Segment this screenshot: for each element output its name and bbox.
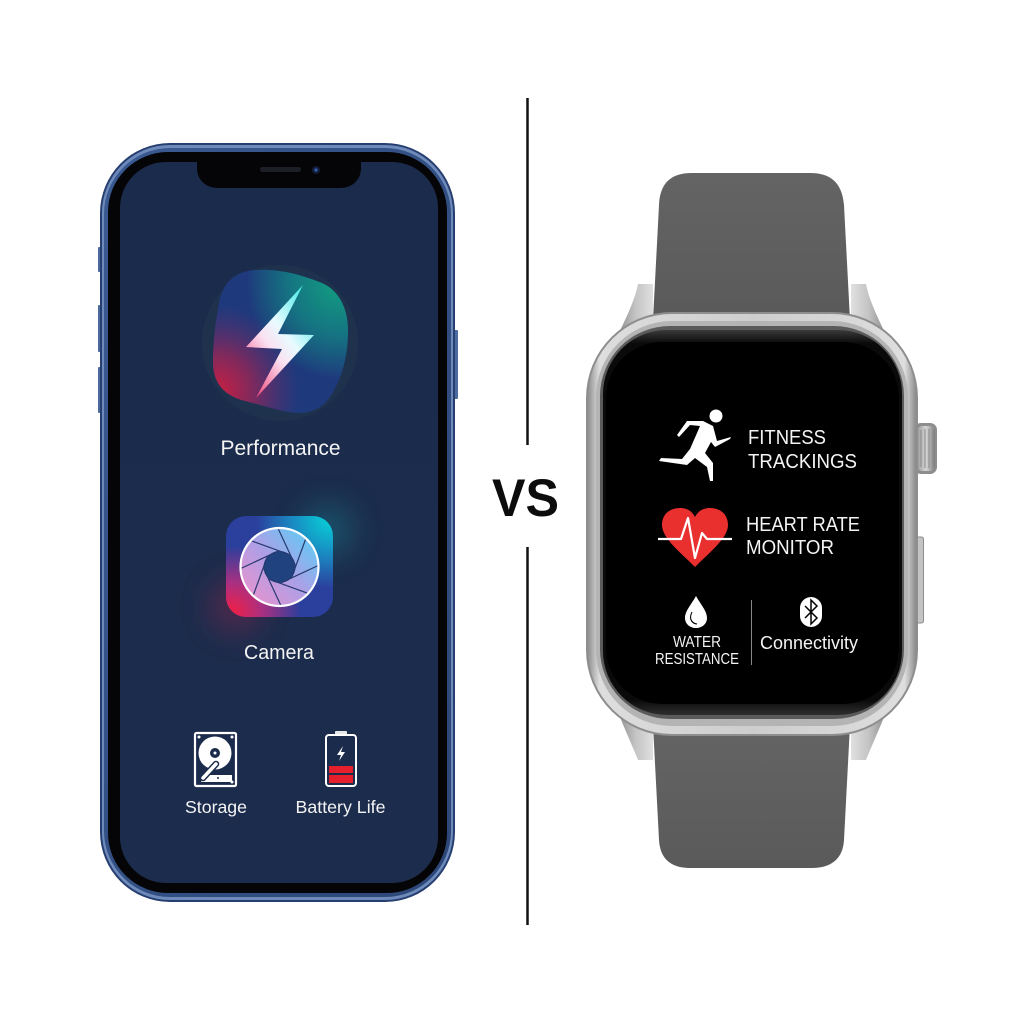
notch (197, 162, 361, 188)
icon: battery (326, 731, 356, 786)
label: fitness trackings: FITNESS (748, 426, 826, 449)
watch side button (916, 537, 924, 623)
label: camera: Camera (244, 642, 315, 664)
icon: runner (659, 410, 731, 481)
label: storage: Storage (185, 797, 247, 817)
icon: storage hard drive (195, 733, 236, 786)
icon: bluetooth (800, 597, 822, 627)
icon: heart with pulse (658, 508, 732, 567)
label: water resistance: WATER (673, 634, 721, 651)
infographic canvas (98, 98, 937, 925)
watch band bottom (653, 725, 850, 868)
label: fitness trackings (748, 426, 857, 473)
watch crown (914, 423, 937, 474)
watch case (586, 312, 918, 736)
label: battery life: Battery Life (296, 797, 386, 817)
icon: camera aperture (210, 504, 354, 632)
label: fitness trackings: TRACKINGS (748, 450, 857, 473)
label: heart rate monitor (746, 513, 860, 559)
label: heart rate monitor: MONITOR (746, 536, 834, 559)
label: water resistance (655, 634, 739, 668)
label: water resistance: RESISTANCE (655, 651, 739, 668)
divider (750, 600, 752, 665)
label: heart rate monitor: HEART RATE (746, 513, 860, 536)
icon: performance lightning bolt (213, 270, 348, 413)
panel: smartphone (98, 143, 458, 902)
panel: smartwatch (586, 173, 937, 868)
vs divider: VS (492, 469, 559, 528)
icon: water drop (685, 596, 707, 628)
watch band top (653, 173, 850, 320)
label: performance: Performance (220, 436, 340, 460)
label: connectivity: Connectivity (760, 633, 858, 653)
watch lugs (618, 284, 886, 760)
